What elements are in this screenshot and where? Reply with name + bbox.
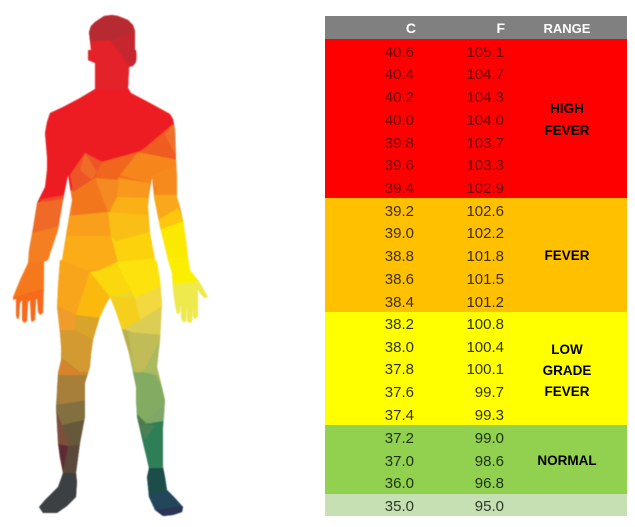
band: high fever: 104.3 (466, 89, 504, 106)
band: fever: 101.8 (466, 248, 504, 265)
temperature table (325, 16, 627, 516)
band: high fever: 102.9 (466, 180, 504, 197)
band: fever: 38.8 (385, 248, 414, 265)
band: low grade fever: GRADE (543, 363, 591, 378)
band: high fever: 104.0 (466, 112, 504, 129)
band: normal: 37.0 (385, 453, 414, 470)
right arm and hand facets (152, 172, 208, 324)
band: high fever: 105.1 (466, 44, 504, 61)
header row: F (496, 20, 505, 36)
band: high fever: 40.2 (385, 89, 414, 106)
band: low grade fever: 38.2 (385, 316, 414, 333)
band: high fever: 40.0 (385, 112, 414, 129)
band: low grade fever: 100.8 (466, 316, 504, 333)
band: normal: 98.6 (475, 453, 504, 470)
band: fever: 39.0 (385, 225, 414, 242)
band: high fever: 39.6 (385, 157, 414, 174)
band: normal: 37.2 (385, 430, 414, 447)
band: high fever: HIGH (550, 101, 584, 116)
right leg facets (121, 328, 184, 516)
band: low grade fever: 37.8 (385, 361, 414, 378)
band: normal: 96.8 (475, 475, 504, 492)
band: below normal (325, 494, 627, 516)
header row: RANGE (544, 21, 591, 36)
band: fever: 39.2 (385, 203, 414, 220)
hair and head (88, 14, 137, 90)
header row: C (406, 20, 416, 36)
header row (325, 16, 627, 39)
band: low grade fever: 100.1 (466, 361, 504, 378)
band: below normal: 95.0 (475, 498, 504, 515)
left arm and hand facets (10, 195, 66, 325)
band: normal (325, 425, 627, 494)
band: low grade fever: 37.6 (385, 384, 414, 401)
band: low grade fever: 37.4 (385, 407, 414, 424)
band: normal: 99.0 (475, 430, 504, 447)
band: fever (325, 198, 627, 312)
band: low grade fever: 100.4 (466, 339, 504, 356)
band: low grade fever: 38.0 (385, 339, 414, 356)
band: fever: FEVER (544, 248, 590, 263)
band: fever: 102.2 (466, 225, 504, 242)
band: low grade fever: FEVER (544, 384, 590, 399)
band: fever: 38.6 (385, 271, 414, 288)
band: low grade fever (325, 312, 627, 425)
band: fever: 102.6 (466, 203, 504, 220)
torso facets (56, 125, 178, 335)
band: fever: 101.5 (466, 271, 504, 288)
band: low grade fever: 99.7 (475, 384, 504, 401)
band: high fever (325, 39, 627, 198)
band: below normal: 35.0 (385, 498, 414, 515)
band: low grade fever: LOW (551, 342, 583, 357)
band: high fever: 39.4 (385, 180, 414, 197)
band: high fever: FEVER (544, 123, 590, 138)
band: fever: 38.4 (385, 294, 414, 311)
band: high fever: 40.6 (385, 44, 414, 61)
band: fever: 101.2 (466, 294, 504, 311)
band: low grade fever: 99.3 (475, 407, 504, 424)
human body figure (12, 14, 209, 517)
band: normal: NORMAL (537, 453, 597, 468)
left leg facets (38, 308, 100, 513)
band: high fever: 103.7 (466, 135, 504, 152)
band: high fever: 104.7 (466, 66, 504, 83)
band: high fever: 40.4 (385, 66, 414, 83)
band: high fever: 39.8 (385, 135, 414, 152)
band: high fever: 103.3 (466, 157, 504, 174)
band: normal: 36.0 (385, 475, 414, 492)
